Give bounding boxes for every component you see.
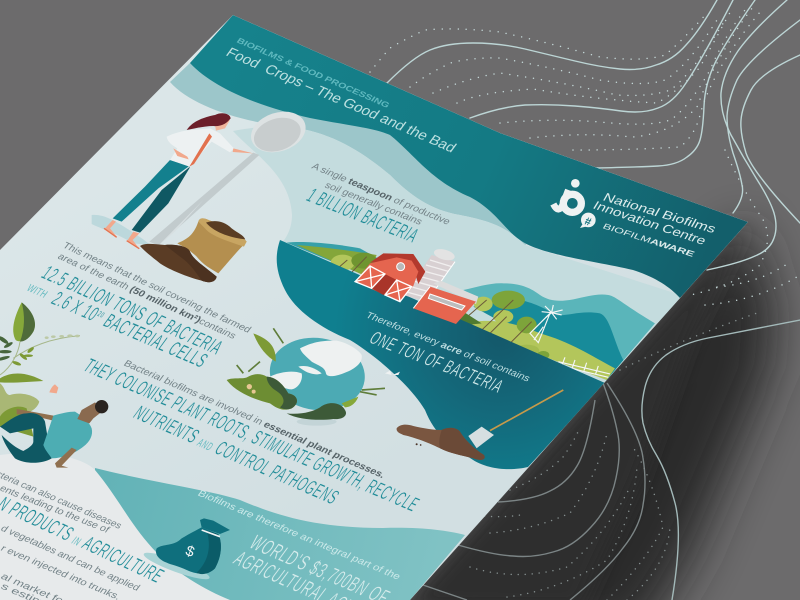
highlight line 1: 12.5 BILLION TONS OF BACTERIA [37, 262, 228, 359]
rope [202, 530, 220, 537]
man arm [17, 409, 55, 421]
sack [177, 218, 247, 273]
highlight: ONE TON OF BACTERIA [365, 329, 508, 397]
plants and man illustration [0, 302, 80, 437]
heading: title: Food Crops – The Good and the Bad [223, 45, 459, 156]
man hair [95, 400, 108, 413]
man head [77, 402, 104, 423]
man trousers [0, 413, 52, 463]
sentence line 2: area of the earth (50 million km²)contains [55, 252, 238, 342]
light region right [233, 126, 690, 383]
highlight line 2: NUTRIENTS AND CONTROL PATHOGENS [129, 402, 344, 509]
heading: kicker: BIOFILMS & FOOD PROCESSING [235, 36, 391, 110]
stems [0, 336, 80, 375]
panel: bottom teal band [95, 468, 465, 600]
highlight line 2: 20 [96, 310, 107, 320]
shed [413, 281, 478, 324]
sentence: Biofilms are therefore an integral part of the [195, 488, 403, 582]
spoon [149, 105, 311, 246]
shadow [142, 548, 212, 584]
ground shadow [92, 215, 150, 245]
line 3: d vegetables and can be applied [0, 524, 142, 593]
header band [190, 15, 748, 298]
contour lines upper [370, 0, 800, 305]
top leaf [13, 302, 35, 341]
man shirt [43, 412, 92, 458]
windmill [530, 305, 563, 343]
splash [385, 371, 400, 375]
panel: soil acre blob [277, 240, 605, 469]
butterfly [49, 384, 58, 393]
silo [406, 249, 456, 300]
shovel and dirt [397, 390, 563, 460]
hashtag: # [583, 215, 593, 229]
shadow [297, 418, 337, 426]
mid hill [473, 300, 623, 380]
highlight line 2: 2.6 X 10 [47, 287, 144, 343]
small sprigs [237, 328, 385, 395]
text: one teaspoon [306, 164, 450, 242]
text: farmed soil [24, 241, 253, 372]
sentence line 2: soil generally contains [322, 180, 425, 227]
money bag icon [142, 518, 230, 584]
left trees [330, 252, 376, 272]
globe [265, 332, 370, 416]
sentence line 1: A single teaspoon of productive [309, 161, 452, 227]
wide leaf [0, 373, 43, 383]
fern [0, 335, 35, 366]
text: bacterial biofilms [79, 354, 424, 516]
flower [247, 384, 252, 389]
left hill [287, 242, 387, 273]
leaves [253, 333, 276, 362]
shrub [299, 261, 323, 274]
sprig leaves [45, 334, 80, 339]
logo hashtag text: BIOFILM AWARE [601, 222, 697, 259]
barn illustration [355, 247, 478, 324]
back bush [0, 383, 39, 420]
small word with: WITH [24, 283, 50, 301]
paper shadow [390, 222, 775, 600]
highlight: 1 BILLION BACTERIA [302, 184, 424, 247]
text: diseases [0, 464, 169, 600]
bag [156, 527, 221, 574]
logo text line 2: Innovation Centre [590, 198, 709, 248]
right trees [457, 291, 549, 359]
woman [104, 113, 253, 249]
fence [558, 357, 610, 377]
sentence: Bacterial biofilms are involved in essential plant processes. [121, 358, 387, 481]
spoon, woman and sack illustration [92, 105, 311, 282]
white bottom-left panel [0, 453, 230, 600]
highlight line 2: BACTERIAL CELLS [95, 308, 213, 372]
contour lines lower [423, 312, 800, 600]
back hills [463, 283, 655, 380]
dirt pile [140, 244, 217, 282]
dollar sign: $ [183, 543, 196, 561]
logo text line 1: National Biofilms [600, 190, 719, 236]
sentence: Therefore, every acre of soil contains [363, 310, 532, 384]
text: integral part [195, 488, 403, 600]
knot [200, 518, 230, 534]
continents [300, 341, 362, 376]
pale band under header [170, 63, 526, 245]
line 2: ents leading to the use of [0, 483, 112, 536]
barn [355, 253, 425, 302]
man figure [0, 400, 108, 468]
globe illustration [227, 328, 400, 426]
sentence line 1: This means that the soil covering the farmed [60, 241, 253, 335]
logo mark [553, 179, 596, 228]
line 4: r even injected into trunks. [0, 543, 123, 600]
man arm lower [55, 448, 77, 468]
green field [460, 321, 615, 380]
scene: farm hills [287, 242, 655, 380]
logo: National Biofilms Innovation Centre [553, 179, 719, 259]
text: acre of soil [368, 312, 530, 393]
